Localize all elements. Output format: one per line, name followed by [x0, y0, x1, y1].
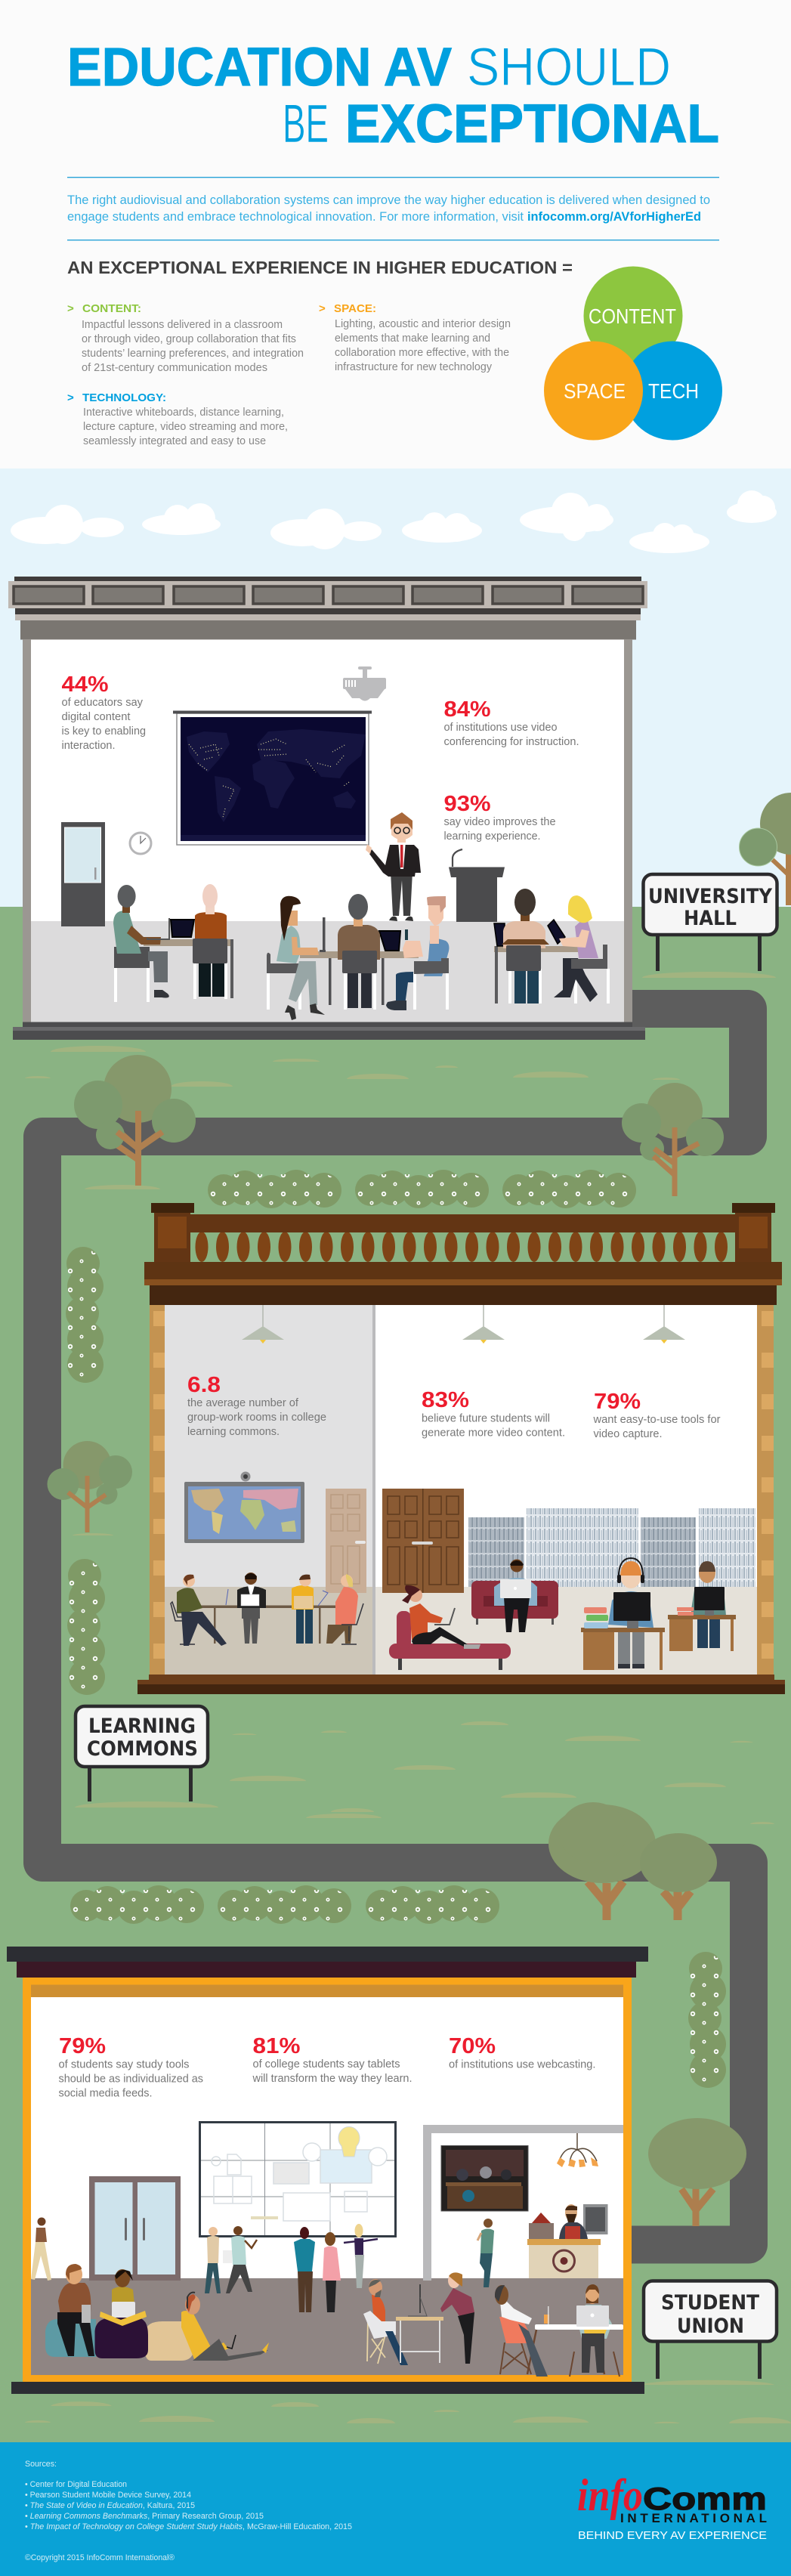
stat: 6.8: 6.8 — [187, 1373, 221, 1397]
icon: projector — [343, 666, 386, 701]
venn diagram — [544, 266, 722, 440]
space definition: > — [319, 302, 326, 315]
page background: header — [0, 0, 791, 469]
woman on chaise longue — [389, 1585, 511, 1670]
technology definition: seamlessly integrated and easy to use — [83, 435, 266, 447]
lounge seating with students — [45, 2264, 269, 2361]
projection screen with night-time world map — [173, 710, 372, 845]
stat: 79%: 79% — [594, 1390, 641, 1414]
content definition: > — [67, 302, 74, 315]
tree: left of learning commons — [47, 1441, 132, 1532]
stat: 6.8 — [187, 1373, 326, 1438]
stat: 44%: is key to enabling — [62, 725, 146, 738]
intro text: The right audiovisual and collaboration systems can improve the way higher education is delivered when designed to — [67, 193, 710, 207]
footer — [0, 2442, 791, 2576]
technology definition: Interactive whiteboards, distance learning, — [83, 407, 284, 419]
infocomm logo: Comm — [643, 2481, 767, 2516]
students: table three — [494, 889, 610, 1003]
content definition: or through video, group collaboration that fits — [82, 333, 296, 345]
panel: learning commons — [137, 1203, 785, 1694]
space definition: infrastructure for new technology — [335, 361, 493, 373]
technology definition: TECHNOLOGY: — [82, 391, 166, 404]
podium — [449, 849, 505, 922]
hedges — [66, 1170, 726, 2088]
stat: 70%: of institutions use webcasting. — [449, 2058, 595, 2070]
stat: 84%: 84% — [444, 697, 491, 722]
stat: 44% — [62, 673, 146, 752]
sources list: • Pearson Student Mobile Device Survey, 2014 — [25, 2491, 191, 2500]
panel: student union — [7, 1947, 648, 2394]
sources list: • The State of Video in Education, Kaltura, 2015 — [25, 2501, 195, 2510]
stat: 79%: of students say study tools — [59, 2058, 189, 2070]
pendant lamps — [242, 1305, 685, 1344]
intro text: infocomm.org/AVforHigherEd — [527, 209, 701, 224]
stat: 70%: 70% — [449, 2034, 496, 2058]
infocomm logo: INTERNATIONAL — [620, 2511, 767, 2525]
bookshelves — [468, 1508, 755, 1587]
students at group table — [171, 1573, 363, 1646]
ground — [0, 907, 791, 2442]
double door — [382, 1489, 464, 1593]
sign: learning commons: COMMONS — [87, 1737, 198, 1761]
student at desk one — [581, 1558, 665, 1670]
space definition — [319, 302, 511, 373]
students: table two — [267, 894, 449, 1020]
grass tufts — [25, 972, 791, 2423]
stat: 79% — [59, 2034, 203, 2099]
student with coffee by the cafe — [477, 2219, 494, 2287]
intro text — [67, 193, 710, 224]
sign: student union — [644, 2281, 777, 2379]
intro text: engage students and embrace technological innovation. For more information, visit — [67, 209, 524, 224]
sign: student union: STUDENT — [661, 2291, 760, 2315]
students at left cafe table — [363, 2272, 474, 2365]
news screen — [441, 2146, 528, 2211]
title: SHOULD — [467, 38, 671, 97]
stat: 93%: 93% — [444, 792, 491, 816]
technology definition: > — [67, 391, 74, 404]
sign: university hall: UNIVERSITY — [648, 885, 772, 908]
teacher — [366, 812, 421, 921]
student at desk two — [668, 1561, 736, 1651]
sources list: • Learning Commons Benchmarks, Primary Research Group, 2015 — [25, 2512, 264, 2521]
roof frieze — [8, 577, 647, 639]
tree: upper right — [622, 1083, 724, 1196]
roof — [7, 1947, 648, 1978]
stat: 79%: 79% — [59, 2034, 106, 2058]
door: study room — [326, 1489, 366, 1593]
stat: 6.8: the average number of — [187, 1396, 299, 1409]
stat: 79%: want easy-to-use tools for — [593, 1413, 721, 1426]
content definition: CONTENT: — [82, 302, 141, 315]
sign: university hall: HALL — [684, 907, 737, 930]
technology definition — [67, 391, 288, 447]
sign: university hall — [644, 874, 777, 971]
stat: 84% — [444, 697, 579, 748]
title: EDUCATION AV — [67, 38, 452, 97]
stat: 44%: 44% — [62, 673, 109, 697]
sources list: Sources: — [25, 2460, 57, 2469]
brick pillars — [150, 1305, 774, 1675]
title — [67, 38, 719, 154]
venn diagram: CONTENT — [589, 305, 676, 328]
venn diagram: TECH — [648, 379, 699, 403]
content definition — [67, 302, 304, 374]
sign: learning commons — [76, 1706, 208, 1801]
road — [42, 1009, 749, 2244]
man on sofa — [471, 1560, 558, 1632]
stat: 81%: 81% — [252, 2034, 301, 2058]
stat: 83% — [422, 1388, 565, 1439]
stat: 93%: learning experience. — [444, 830, 541, 843]
tree: right of university hall — [739, 793, 791, 905]
stat: 84%: of institutions use video — [444, 721, 558, 734]
panel: university hall — [8, 577, 647, 1040]
title: BE — [283, 94, 329, 154]
infocomm logo: BEHIND EVERY AV EXPERIENCE — [578, 2529, 767, 2542]
stat: 44%: interaction. — [62, 739, 115, 752]
balustrade roof — [144, 1203, 782, 1305]
stat: 44%: of educators say — [62, 696, 143, 709]
stat: 84%: conferencing for instruction. — [444, 735, 579, 748]
video wall — [199, 2122, 396, 2237]
space definition: SPACE: — [334, 302, 376, 315]
stat: 83%: believe future students will — [422, 1412, 550, 1425]
stat: 93% — [444, 792, 556, 843]
stat: 79%: social media feeds. — [59, 2087, 153, 2099]
cafe alcove frame — [423, 2125, 623, 2281]
stat: 83%: 83% — [422, 1388, 469, 1412]
room walls and floors — [137, 1305, 785, 1694]
stat: 81%: of college students say tablets — [252, 2058, 400, 2070]
stat: 81% — [252, 2034, 412, 2085]
standing students at video wall — [205, 2224, 378, 2312]
stat: 6.8: learning commons. — [187, 1425, 280, 1438]
glass entrance doors — [89, 2176, 181, 2281]
stat: 70% — [449, 2034, 595, 2070]
sources list — [25, 2460, 352, 2562]
content definition: of 21st-century communication modes — [82, 362, 267, 374]
section heading: AN EXCEPTIONAL EXPERIENCE IN HIGHER EDUCATION = — [67, 258, 573, 277]
sources list: • The Impact of Technology on College Student Study Habits, McGraw-Hill Education, 2015 — [25, 2522, 352, 2531]
infocomm logo — [577, 2470, 767, 2542]
stat: 79%: should be as individualized as — [59, 2072, 203, 2086]
technology definition: lecture capture, video streaming and more, — [83, 421, 288, 433]
venn diagram: SPACE — [564, 379, 626, 403]
stat: 93%: say video improves the — [444, 815, 556, 828]
content definition: students’ learning preferences, and integration — [82, 348, 304, 360]
tree: upper left — [74, 1055, 196, 1186]
stat: 44%: digital content — [62, 710, 131, 723]
sources list: ©Copyright 2015 InfoComm International® — [25, 2553, 175, 2562]
stat: 83%: generate more video content. — [422, 1427, 565, 1439]
space definition: collaboration more effective, with the — [335, 347, 509, 359]
coffee counter with barista — [527, 2204, 607, 2278]
content definition: Impactful lessons delivered in a classroom — [82, 319, 283, 331]
chandelier — [557, 2133, 598, 2167]
icon: clock — [130, 833, 151, 854]
tree: right of student union — [648, 2118, 746, 2226]
walking woman — [31, 2217, 51, 2281]
sign: student union: UNION — [677, 2315, 744, 2338]
door — [61, 822, 105, 926]
sources list: • Center for Digital Education — [25, 2480, 127, 2489]
space definition: elements that make learning and — [335, 332, 490, 345]
space definition: Lighting, acoustic and interior design — [335, 318, 511, 330]
stat: 79%: video capture. — [594, 1427, 662, 1440]
wall display with political map — [184, 1472, 304, 1543]
title: EXCEPTIONAL — [345, 94, 719, 154]
sky — [0, 469, 791, 907]
clouds — [11, 490, 777, 553]
students: table one — [113, 884, 233, 1002]
stat: 79% — [593, 1390, 721, 1440]
sign: learning commons: LEARNING — [88, 1715, 196, 1738]
infocomm logo: info — [577, 2470, 643, 2520]
stat: 81%: will transform the way they learn. — [252, 2072, 412, 2085]
tree: large pair near lower road — [548, 1802, 717, 1920]
students at right cafe table — [495, 2284, 623, 2377]
stat: 6.8: group-work rooms in college — [187, 1411, 326, 1424]
